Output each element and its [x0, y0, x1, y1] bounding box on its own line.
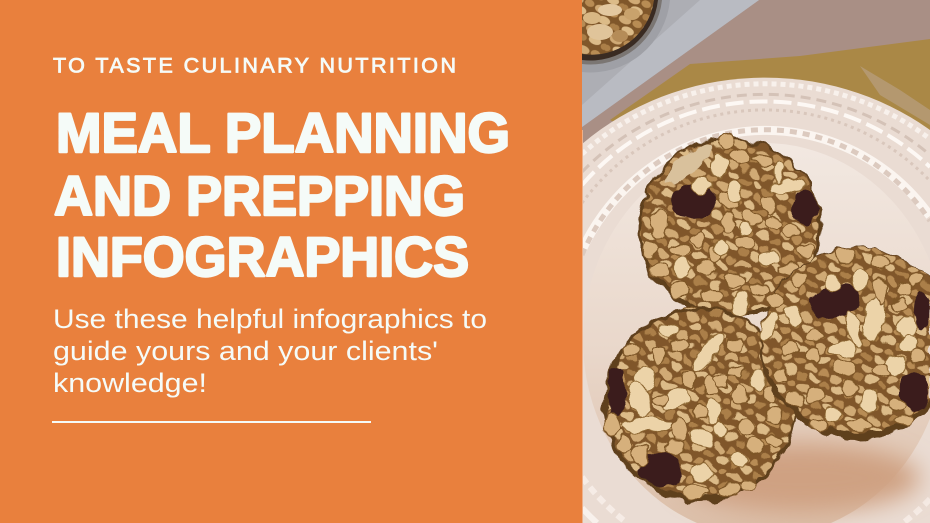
subtitle text — [53, 304, 487, 398]
title: Meal Planning and Prepping Infographics — [54, 101, 510, 288]
title: Meal Planning and Prepping Infographics: AND PREPPING — [54, 164, 465, 227]
tablecloth — [582, 0, 930, 145]
title: Meal Planning and Prepping Infographics: INFOGRAPHICS — [56, 225, 469, 288]
panel: orange background — [0, 0, 582, 523]
subtitle text: guide yours and your clients' — [53, 336, 438, 366]
plate — [582, 78, 930, 523]
subtitle text: knowledge! — [53, 368, 207, 398]
divider line — [52, 421, 371, 423]
muffin: right — [757, 247, 930, 439]
muffin: top — [638, 136, 822, 318]
photo: oat muffins on a white plate — [582, 0, 930, 523]
muffin: bottom left — [603, 308, 797, 502]
subtitle text: Use these helpful infographics to — [53, 304, 487, 334]
kicker: To Taste Culinary Nutrition: TO TASTE CULINARY NUTRITION — [53, 54, 456, 78]
title: Meal Planning and Prepping Infographics: MEAL PLANNING — [56, 101, 510, 164]
muffin tin — [582, 0, 759, 127]
